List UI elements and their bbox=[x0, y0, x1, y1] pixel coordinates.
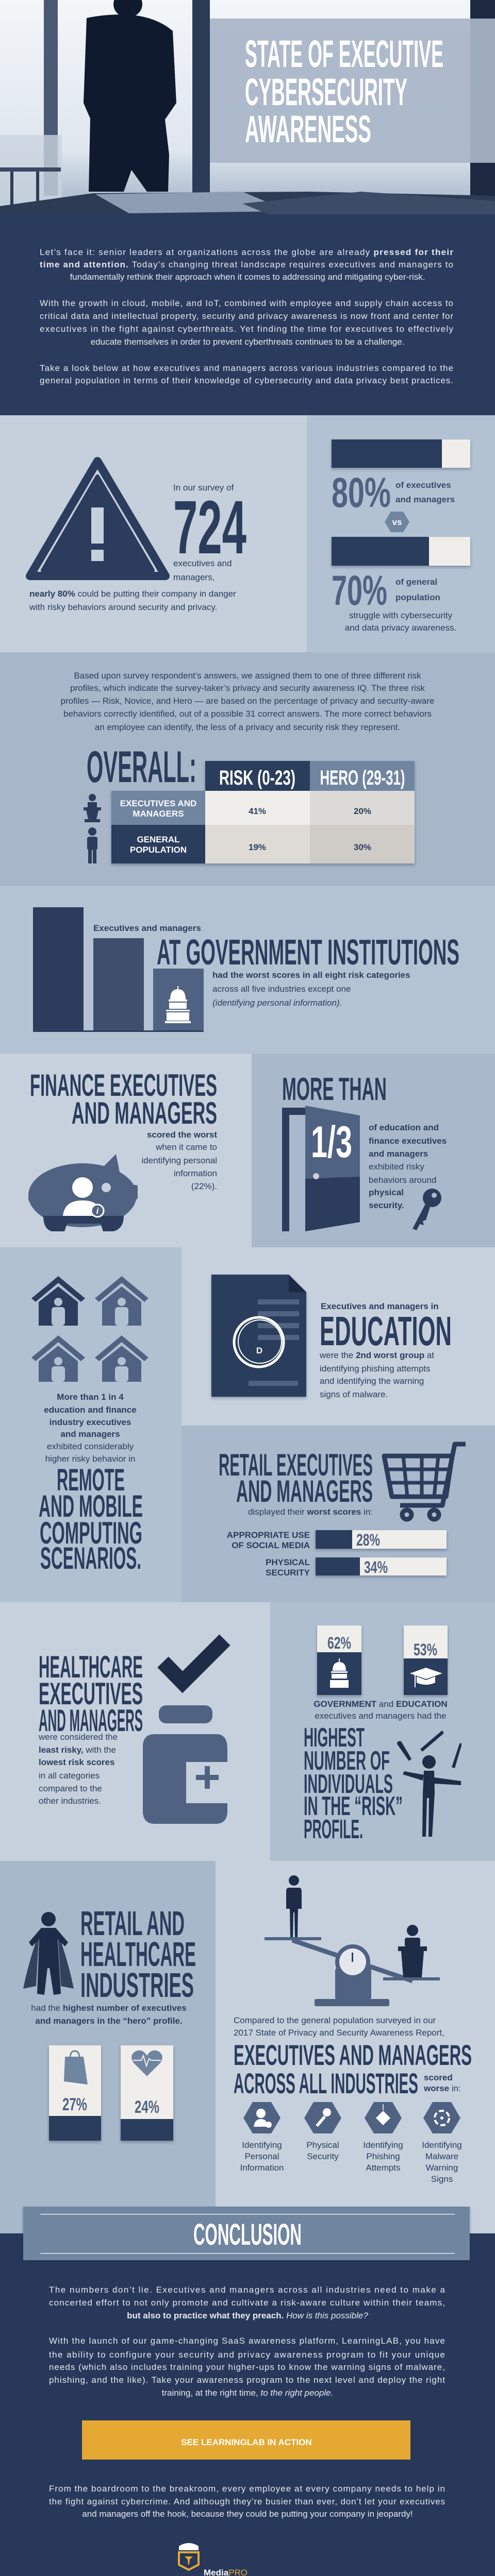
intro section: general population in terms of their knowledge of cybersecurity and data privacy best practices. bbox=[40, 376, 453, 385]
panel: retail and healthcare hero: 24% bbox=[135, 2097, 159, 2117]
panel: retail worst scores: displayed their worst scores in: bbox=[248, 1507, 373, 1517]
panel: finance executives: identifying personal bbox=[142, 1156, 217, 1165]
panel: retail and healthcare hero: and managers in the “hero” profile. bbox=[35, 2016, 183, 2026]
intro section: With the growth in cloud, mobile, and IoT, combined with employee and supply chain access to bbox=[40, 298, 453, 308]
bar chart: government bbox=[33, 907, 204, 1032]
panel: remote and mobile: industry executives bbox=[50, 1417, 131, 1427]
panel: more than 1/3: MORE THAN bbox=[282, 1072, 387, 1107]
panel: healthcare least risky: HEALTHCARE bbox=[39, 1650, 143, 1684]
panel: retail and healthcare hero: HEALTHCARE bbox=[80, 1935, 196, 1974]
panel: more than 1/3: security. bbox=[369, 1200, 404, 1210]
icon: personal information hexagon bbox=[243, 2102, 280, 2133]
intro section: time and attention. Today’s changing threat landscape requires executives and managers to bbox=[40, 260, 453, 269]
conclusion section: the ability to configure your security and privacy awareness program to fit your unique bbox=[49, 2350, 445, 2360]
card: healthcare 24% bbox=[121, 2045, 173, 2141]
conclusion section: the fight against cybercrime. And although they’re busier than ever, don’t let your executives bbox=[49, 2497, 445, 2506]
panel: all industries scored worse: Identifying bbox=[363, 2140, 403, 2150]
bar chart: retail: 28% bbox=[356, 1531, 380, 1549]
table: overall: 19% bbox=[249, 842, 266, 852]
icon: key bbox=[412, 1189, 441, 1230]
icon: open door: 1/3 bbox=[311, 1117, 352, 1167]
heading: conclusion band: CONCLUSION bbox=[193, 2218, 302, 2251]
intro section: Let’s face it: senior leaders at organizations across the globe are already pressed for their bbox=[40, 247, 453, 257]
panel: 80% vs 70%: of general bbox=[395, 577, 437, 587]
icon: shopping cart bbox=[384, 1444, 466, 1519]
conclusion section: needs (which also includes training your higher-ups to know the warning signs of malware, bbox=[49, 2362, 445, 2372]
panel: government institutions: across all five industries except one bbox=[212, 984, 351, 994]
panel: survey of 724: with risky behaviors around security and privacy. bbox=[29, 602, 217, 612]
conclusion section: The numbers don’t lie. Executives and managers across all industries need to make a bbox=[49, 2285, 446, 2295]
panel: survey of 724: executives and bbox=[173, 558, 232, 568]
conclusion section bbox=[0, 2207, 495, 2576]
icon: physical security hexagon bbox=[304, 2102, 341, 2133]
panel: all industries scored worse: Physical bbox=[306, 2140, 339, 2150]
bar chart: retail: PHYSICAL bbox=[266, 1557, 310, 1567]
panel: 80% vs 70%: and data privacy awareness. bbox=[345, 623, 456, 633]
panel: education: were the 2nd worst group at bbox=[319, 1350, 434, 1360]
panel: healthcare least risky: compared to the bbox=[39, 1784, 102, 1793]
panel: survey of 724: 724 bbox=[173, 485, 246, 570]
panel: remote and mobile: More than 1 in 4 bbox=[57, 1392, 124, 1402]
panel: government institutions: (identifying personal information). bbox=[212, 998, 342, 1008]
intro section: fundamentally rethink their approach when it comes to addressing and mitigating cyber-risk. bbox=[70, 272, 425, 282]
table: overall bbox=[111, 761, 415, 863]
panel: highest number in risk profile: HIGHEST bbox=[304, 1723, 365, 1753]
icon: superhero bbox=[23, 1912, 74, 1995]
icon: warning triangle bbox=[30, 461, 166, 576]
table: overall: GENERAL bbox=[137, 835, 180, 844]
chart: edu 53% bbox=[404, 1625, 448, 1695]
panel: highest number in risk profile bbox=[270, 1602, 495, 1861]
panel: overall risk profiles: profiles — Risk, Novice, and Hero — are based on the percentage of privacy and security-aware bbox=[61, 696, 434, 706]
panel: all industries scored worse: Signs bbox=[431, 2174, 453, 2184]
panel: all industries scored worse: worse in: bbox=[423, 2083, 461, 2093]
panel: education: and identifying the warning bbox=[320, 1376, 424, 1386]
panel: education: Executives and managers in bbox=[321, 1301, 439, 1311]
bar chart: retail: APPROPRIATE USE bbox=[227, 1530, 310, 1540]
title box bbox=[210, 19, 495, 163]
panel: education: identifying phishing attempts bbox=[320, 1364, 431, 1374]
hero photo bbox=[0, 0, 495, 214]
icon: document with D grade bbox=[211, 1275, 306, 1397]
panel: healthcare least risky: in all categories bbox=[39, 1771, 100, 1781]
panel: 80% vs 70%: 80% bbox=[332, 469, 391, 516]
panel: retail and healthcare hero: INDUSTRIES bbox=[80, 1966, 194, 2005]
icon: piggy bank bbox=[28, 1154, 138, 1231]
panel: more than 1/3: of education and bbox=[369, 1123, 439, 1132]
panel: government institutions bbox=[0, 886, 495, 1054]
panel: 80% vs 70%: of executives bbox=[395, 480, 451, 490]
panel: all industries scored worse: Identifying bbox=[242, 2140, 282, 2150]
chart: gov 62% bbox=[317, 1625, 361, 1695]
panel: 80% vs 70%: struggle with cybersecurity bbox=[349, 611, 453, 620]
card: retail 27% bbox=[49, 2045, 101, 2141]
panel: healthcare least risky: other industries. bbox=[39, 1796, 101, 1806]
table: overall: MANAGERS bbox=[133, 809, 184, 819]
panel: finance executives: FINANCE EXECUTIVES bbox=[30, 1068, 217, 1103]
panel: education bbox=[182, 1247, 495, 1426]
panel: more than 1/3: behaviors around bbox=[369, 1175, 436, 1185]
icon: phishing hexagon bbox=[365, 2102, 402, 2133]
vs hexagon bbox=[385, 512, 409, 532]
panel: 80% vs 70%: population bbox=[395, 592, 440, 602]
bar chart: retail bbox=[227, 1530, 447, 1578]
panel: remote and mobile: exhibited considerably bbox=[47, 1442, 134, 1451]
conclusion section: training, at the right time, to the right people. bbox=[162, 2388, 333, 2398]
table: overall: RISK (0-23) bbox=[219, 767, 295, 789]
panel: overall risk profiles: OVERALL: bbox=[87, 742, 196, 792]
panel: overall risk profiles: behaviors correctly identified, out of a possible 31 correct answers. The more correct behaviors bbox=[63, 709, 432, 719]
intro section bbox=[0, 214, 495, 415]
icon: document with D grade: D bbox=[256, 1346, 262, 1355]
panel: all industries scored worse: Malware bbox=[425, 2151, 458, 2161]
panel: healthcare least risky: AND MANAGERS bbox=[39, 1703, 143, 1738]
panel: retail and healthcare hero: RETAIL AND bbox=[80, 1904, 185, 1943]
panel: retail worst scores: AND MANAGERS bbox=[236, 1474, 373, 1509]
panel: overall risk profiles: an employee can identify, the less of a privacy and security risk they represent. bbox=[95, 722, 400, 732]
panel: all industries scored worse: Attempts bbox=[366, 2163, 401, 2173]
panel: highest number in risk profile: 62% bbox=[327, 1634, 351, 1652]
panel: highest number in risk profile: executives and managers had the bbox=[315, 1711, 447, 1721]
panel: healthcare least risky bbox=[0, 1602, 270, 1861]
intro section: executives in the fight against cyberthreats. Yet finding the time for executives to effectively bbox=[40, 324, 453, 334]
panel: remote and mobile: AND MOBILE bbox=[39, 1489, 143, 1523]
bar: executives 80% bbox=[332, 439, 470, 468]
icon: person bbox=[87, 827, 97, 863]
panel: all industries scored worse: Warning bbox=[426, 2163, 458, 2173]
table: overall: HERO (29-31) bbox=[320, 767, 405, 789]
panel: all industries scored worse bbox=[216, 1861, 495, 2233]
panel: highest number in risk profile: PROFILE. bbox=[304, 1815, 363, 1844]
panel: all industries scored worse: Information bbox=[240, 2163, 284, 2173]
table: overall: 30% bbox=[354, 842, 371, 852]
panel: overall risk profiles: profiles, which indicate the survey-taker’s privacy and security awareness IQ. The three risk bbox=[70, 683, 425, 693]
panel: 80% vs 70% bbox=[307, 415, 495, 652]
title box: AWARENESS bbox=[245, 108, 371, 150]
panel: retail worst scores bbox=[182, 1426, 495, 1602]
panel: survey of 724: In our survey of bbox=[173, 483, 234, 493]
icon: piggy bank: i bbox=[96, 1206, 100, 1216]
panel: remote and mobile: higher risky behavior in bbox=[45, 1454, 135, 1464]
panel: finance executives bbox=[0, 1054, 252, 1247]
panel: remote and mobile: SCENARIOS. bbox=[40, 1541, 141, 1575]
panel: healthcare least risky: lowest risk scores bbox=[39, 1757, 114, 1767]
icon: scale with people bbox=[265, 1875, 440, 2006]
table: overall: EXECUTIVES AND bbox=[120, 799, 196, 808]
panel: retail and healthcare hero: had the highest number of executives bbox=[31, 2003, 187, 2013]
logo: MediaPRO bbox=[179, 2543, 339, 2576]
panel: remote and mobile: education and finance bbox=[44, 1405, 137, 1415]
panel: more than 1/3: finance executives bbox=[369, 1136, 447, 1146]
bar: general population 70% bbox=[332, 537, 470, 566]
panel: finance executives: AND MANAGERS bbox=[72, 1096, 217, 1130]
conclusion section: and managers off the hook, because they could be putting your company in jeopardy! bbox=[82, 2509, 413, 2519]
conclusion section: phishing, and the like). Take your awareness program to the next level and deploy the right bbox=[49, 2375, 445, 2385]
panel: highest number in risk profile: GOVERNMENT and EDUCATION bbox=[314, 1699, 448, 1709]
panel: remote and mobile: REMOTE bbox=[57, 1463, 125, 1497]
panel: highest number in risk profile: INDIVIDUALS bbox=[304, 1769, 393, 1799]
panel: finance executives: when it came to bbox=[155, 1142, 217, 1152]
conclusion section: With the launch of our game-changing SaaS awareness platform, LearningLAB, you have bbox=[49, 2336, 445, 2346]
panel: survey of 724: managers, bbox=[173, 572, 214, 582]
button: see learninglab: SEE LEARNINGLAB IN ACTION bbox=[181, 2437, 312, 2447]
panel: more than 1/3: physical bbox=[369, 1188, 404, 1197]
panel: education: signs of malware. bbox=[320, 1389, 388, 1399]
panel: more than 1/3: exhibited risky bbox=[369, 1162, 424, 1172]
panel: overall risk profiles bbox=[0, 652, 495, 886]
intro section: critical data and intellectual property, security and privacy awareness is now front and center for bbox=[40, 311, 453, 321]
conclusion section: but also to practice what they preach. How is this possible? bbox=[127, 2311, 368, 2320]
panel: healthcare least risky: least risky, with the bbox=[39, 1745, 116, 1755]
panel: healthcare least risky: were considered the bbox=[38, 1732, 118, 1742]
heading: conclusion band bbox=[23, 2207, 470, 2260]
panel: retail and healthcare hero: 27% bbox=[62, 2095, 87, 2114]
panel: retail and healthcare hero bbox=[0, 1861, 216, 2233]
panel: 80% vs 70%: 70% bbox=[332, 567, 387, 614]
table: overall: POPULATION bbox=[130, 845, 187, 855]
bar chart: retail: 34% bbox=[364, 1558, 388, 1577]
panel: remote and mobile: COMPUTING bbox=[40, 1516, 142, 1550]
panel: highest number in risk profile: 53% bbox=[414, 1640, 437, 1659]
button: see learninglab bbox=[82, 2420, 410, 2460]
panel: all industries scored worse: Identifying bbox=[422, 2140, 462, 2150]
icon: checkmark bbox=[163, 1640, 225, 1682]
intro section: Take a look below at how executives and managers across various industries compared to the bbox=[40, 363, 453, 373]
bar chart: retail: OF SOCIAL MEDIA bbox=[232, 1540, 310, 1550]
bar chart: retail: SECURITY bbox=[266, 1568, 310, 1578]
icon: open door bbox=[282, 1106, 360, 1231]
panel: all industries scored worse: Compared to the general population surveyed in our bbox=[234, 2015, 436, 2025]
panel: remote and mobile: and managers bbox=[60, 1429, 120, 1439]
table: overall: 20% bbox=[354, 806, 371, 816]
panel: all industries scored worse: 2017 State of Privacy and Security Awareness Report, bbox=[234, 2028, 444, 2038]
panel: finance executives: scored the worst bbox=[147, 1130, 217, 1140]
panel: all industries scored worse: scored bbox=[424, 2073, 453, 2082]
intro section: educate themselves in order to prevent cyberthreats continues to be a challenge. bbox=[91, 337, 404, 347]
panel: highest number in risk profile: NUMBER OF bbox=[304, 1746, 390, 1776]
panel: government institutions: had the worst scores in all eight risk categories bbox=[212, 970, 410, 980]
panel: healthcare least risky: EXECUTIVES bbox=[39, 1676, 143, 1711]
icon: executive at podium bbox=[84, 794, 101, 822]
panel: remote and mobile bbox=[0, 1247, 182, 1602]
icon: malware hexagon bbox=[423, 2102, 460, 2133]
panel: all industries scored worse: Personal bbox=[244, 2151, 279, 2161]
panel: survey of 724: nearly 80% could be putting their company in danger bbox=[29, 589, 236, 599]
conclusion section: concerted effort to not only promote and cultivate a risk-aware culture within their teams, bbox=[49, 2298, 445, 2308]
icon: medicine bottle bbox=[143, 1705, 227, 1824]
vs hexagon: vs bbox=[392, 517, 402, 527]
panel: finance executives: information bbox=[174, 1168, 217, 1178]
table: overall: 41% bbox=[249, 806, 266, 816]
panel: more than 1/3: and managers bbox=[369, 1149, 428, 1159]
panel: government institutions: Executives and managers bbox=[93, 923, 201, 933]
panel: survey of 724 bbox=[0, 415, 307, 652]
panel: overall risk profiles: Based upon survey respondent’s answers, we assigned them to one of three different risk bbox=[74, 671, 421, 681]
panel: 80% vs 70%: and managers bbox=[395, 495, 455, 504]
panel: highest number in risk profile: IN THE “RISK” bbox=[304, 1791, 403, 1821]
panel: all industries scored worse: Phishing bbox=[366, 2151, 400, 2161]
panel: more than 1/3 bbox=[252, 1054, 495, 1247]
panel: all industries scored worse: Security bbox=[307, 2151, 339, 2161]
conclusion section: From the boardroom to the breakroom, every employee at every company needs to help in bbox=[49, 2484, 445, 2494]
panel: finance executives: (22%). bbox=[191, 1181, 217, 1191]
icon: houses bbox=[31, 1276, 148, 1382]
icon: juggler with knives bbox=[397, 1731, 461, 1837]
